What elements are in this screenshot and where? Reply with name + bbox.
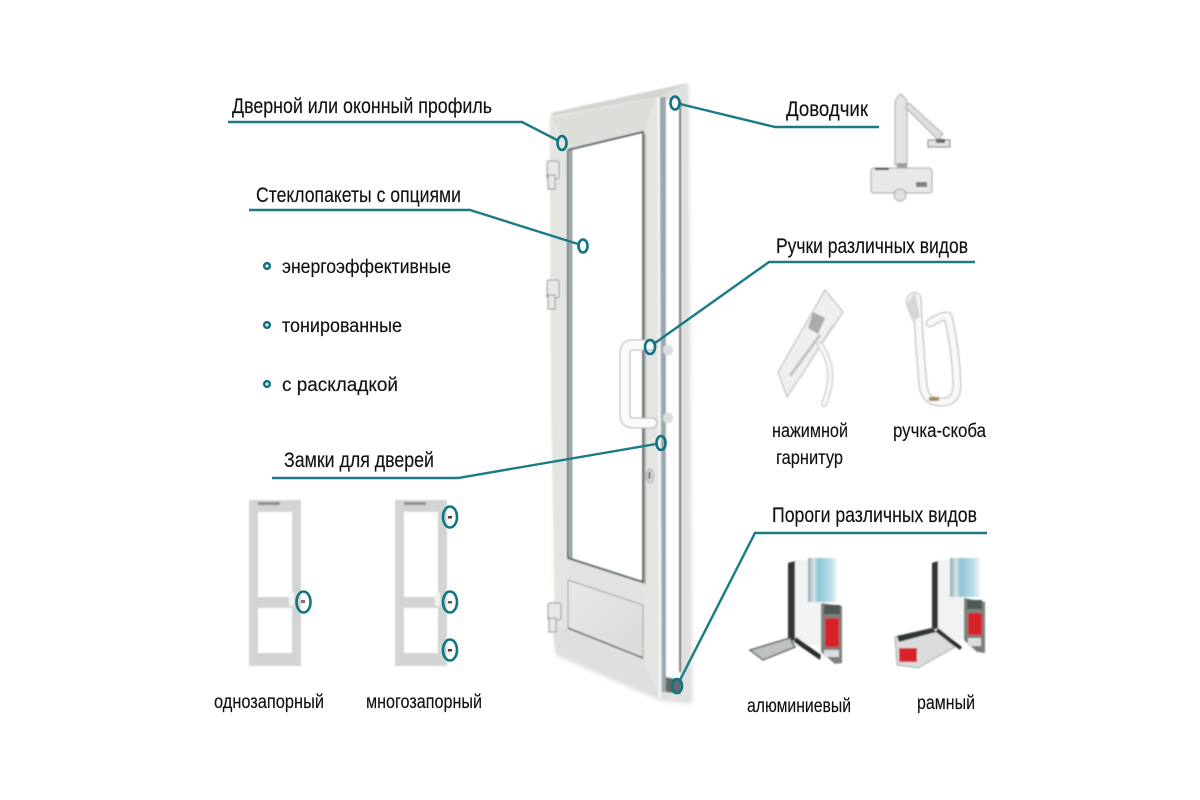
icon: frame threshold <box>895 558 985 668</box>
label: door closer <box>670 96 879 127</box>
door handle <box>625 345 673 423</box>
label: handles: Ручки различных видов <box>776 235 968 258</box>
main door illustration <box>547 83 692 704</box>
caption: single-point lock: однозапорный <box>214 692 324 713</box>
label: door closer: Доводчик <box>786 98 869 121</box>
icon: aluminium threshold <box>750 558 842 664</box>
list: glazing options: энергоэффективные <box>282 257 451 278</box>
label: thresholds <box>672 504 987 693</box>
label: thresholds: Пороги различных видов <box>772 504 977 527</box>
gasket edge <box>658 97 660 698</box>
label: door locks: Замки для дверей <box>284 449 434 472</box>
label: glazing with options: Стеклопакеты с опциями <box>256 184 461 207</box>
door frame <box>655 83 690 702</box>
lower panel <box>568 580 643 658</box>
keyhole <box>646 469 654 483</box>
glass pane <box>568 132 643 582</box>
label: handles <box>645 235 975 354</box>
door sash <box>550 97 660 698</box>
caption: aluminium threshold: алюминиевый <box>747 696 851 717</box>
icon: door closer <box>871 94 950 201</box>
caption: lever handle: нажимной <box>772 421 848 442</box>
label: door or window profile <box>228 95 566 150</box>
caption: pull handle: ручка-скоба <box>893 421 986 442</box>
list: glazing options: тонированные <box>282 316 402 337</box>
list: glazing options: с раскладкой <box>282 375 398 396</box>
caption: lever handle <box>772 421 848 469</box>
list: glazing options <box>264 257 451 396</box>
caption: lever handle: гарнитур <box>776 448 843 469</box>
icon: lever handle <box>778 290 843 404</box>
label: door locks <box>272 436 666 478</box>
icon: multi-point lock door <box>395 500 457 666</box>
hinges <box>547 161 561 632</box>
icon: pull handle <box>906 292 957 402</box>
caption: frame threshold: рамный <box>917 693 975 714</box>
icon: single-point lock door <box>249 500 310 666</box>
caption: multi-point lock: многозапорный <box>366 692 482 713</box>
label: door or window profile: Дверной или оконный профиль <box>232 95 492 118</box>
label: glazing with options <box>249 184 588 252</box>
